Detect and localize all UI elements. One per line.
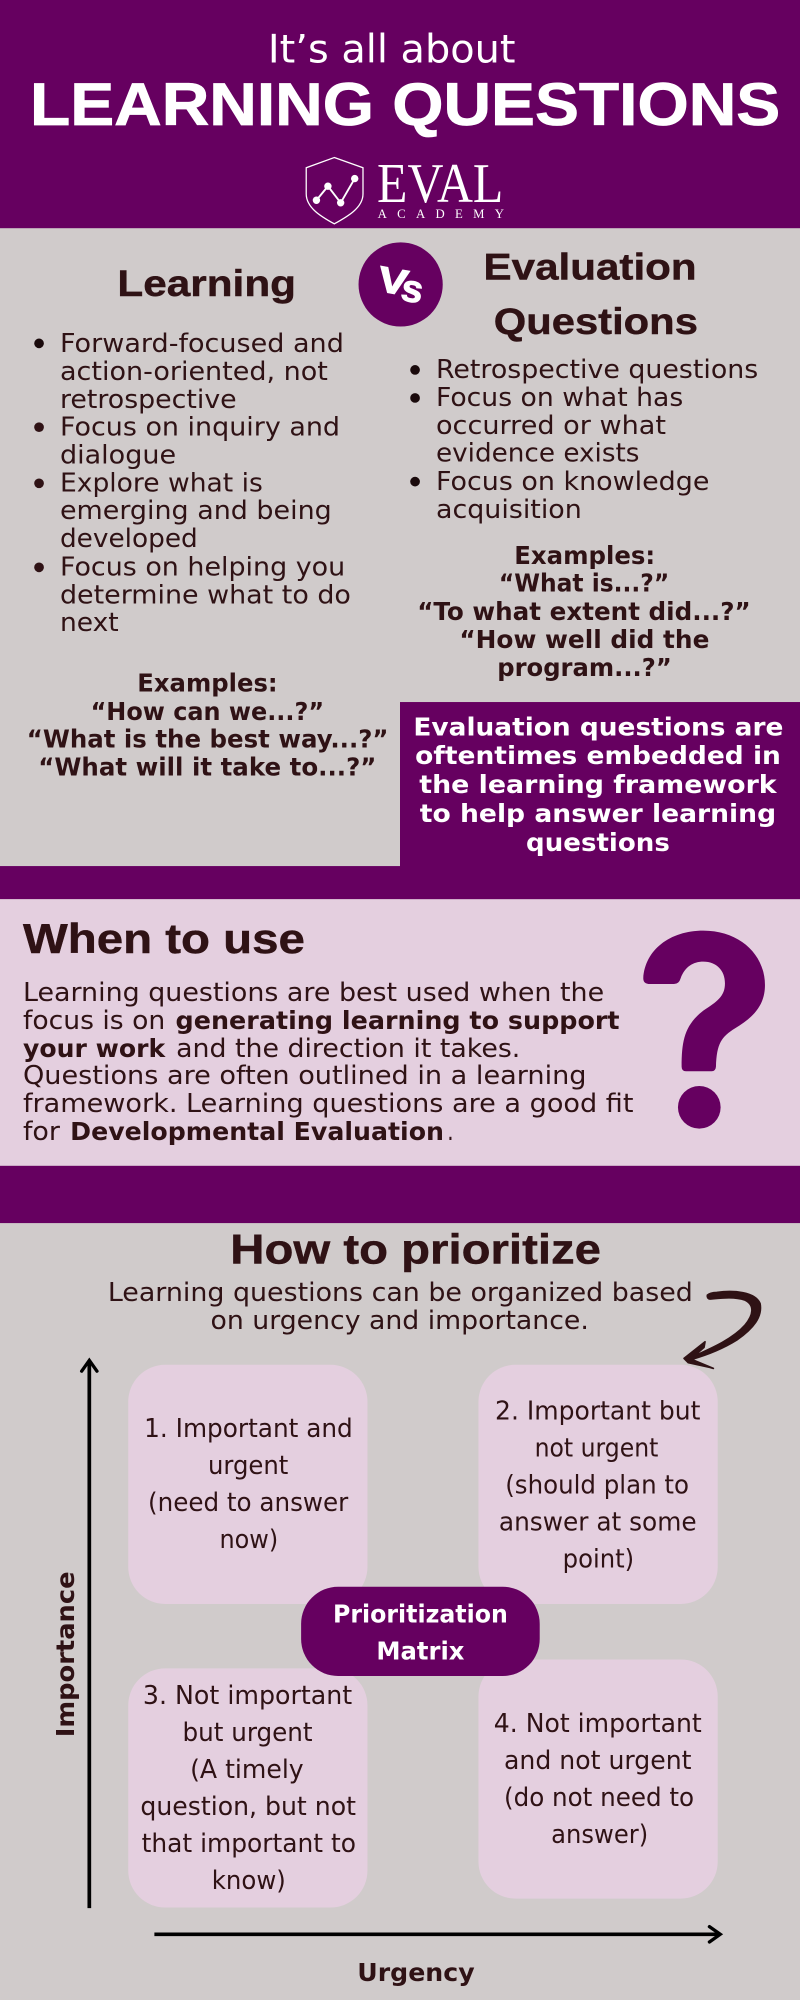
band: purple divider [0, 1166, 800, 1223]
list: learning question traits: Explore what is [60, 468, 263, 498]
heading: When to use: When to use [23, 915, 305, 962]
list: evaluation question traits [410, 355, 758, 525]
arrow: curly arrow to box 2 [684, 1291, 760, 1368]
heading: Evaluation Questions: Questions [494, 301, 698, 342]
title line: It's all about: It’s all about [268, 27, 515, 72]
text: when to use body: for [23, 1117, 60, 1147]
box 2: important but not urgent: not urgent [535, 1434, 658, 1464]
list: learning question traits: next [60, 608, 119, 638]
examples: evaluation questions: “What is...?” [499, 569, 669, 598]
box 4: not important and not urgent: answer) [551, 1820, 648, 1850]
examples: evaluation questions: program...?” [497, 653, 672, 682]
list: evaluation question traits: Focus on what has [436, 383, 683, 413]
examples: learning questions: “What will it take to...?” [38, 753, 376, 782]
panel: how to prioritize [0, 1223, 800, 2000]
icon: Vs circle: V [375, 259, 411, 304]
heading: How to prioritize: How to prioritize [230, 1225, 601, 1272]
list: learning question traits: developed [60, 524, 198, 554]
box 2: important but not urgent: 2. Important but [495, 1397, 700, 1427]
examples: evaluation questions: “To what extent did...?” [417, 597, 751, 626]
callout: evaluation questions embedded [400, 702, 800, 899]
text: when to use body [23, 978, 633, 1147]
box 1: important and urgent: urgent [208, 1451, 288, 1481]
list: learning question traits: determine what to do [60, 580, 351, 610]
text: when to use body: focus is on [23, 1006, 165, 1036]
examples: learning questions: “How can we...?” [91, 697, 324, 726]
list: evaluation question traits: evidence exists [436, 439, 639, 469]
box 3: not important but urgent: (A timely [190, 1755, 304, 1785]
callout: evaluation questions embedded: to help answer learning [420, 799, 776, 828]
examples: evaluation questions: Examples: [514, 541, 655, 570]
icon: Vs circle: s [398, 266, 427, 312]
heading: Evaluation Questions: Evaluation [484, 246, 697, 287]
list: learning question traits: dialogue [60, 440, 176, 470]
icon: Vs circle [359, 242, 443, 327]
label: Prioritization Matrix: Matrix [376, 1636, 464, 1665]
box 2: important but not urgent: point) [563, 1545, 634, 1575]
text: prioritize intro [108, 1278, 693, 1336]
text: when to use body: your work [23, 1034, 166, 1063]
text: prioritize intro: Learning questions can be organized based [108, 1278, 693, 1308]
examples: evaluation questions: “How well did the [459, 625, 709, 654]
logo: Eval Academy: ACADEMY [378, 207, 504, 221]
label: Prioritization Matrix [301, 1587, 540, 1676]
label: Prioritization Matrix: Prioritization [333, 1599, 508, 1628]
box 3: not important but urgent [128, 1668, 367, 1908]
box 3: not important but urgent: know) [212, 1866, 286, 1896]
arrow: urgency axis [154, 1927, 720, 1942]
callout: evaluation questions embedded: oftentimes embedded in [415, 741, 781, 770]
list: evaluation question traits: Retrospective questions [436, 355, 758, 385]
logo: Eval Academy: EVAL [377, 153, 503, 215]
list: learning question traits: Focus on inquiry and [60, 413, 340, 443]
text: prioritize intro: on urgency and importance. [211, 1306, 589, 1336]
box 1: important and urgent [128, 1365, 367, 1604]
callout: evaluation questions embedded: Evaluation questions are [413, 713, 783, 742]
heading: Learning: Learning [117, 263, 296, 304]
callout: evaluation questions embedded: the learning framework [419, 770, 778, 799]
box 1: important and urgent: (need to answer [148, 1488, 349, 1518]
box 2: important but not urgent: answer at some [499, 1508, 697, 1538]
box 1: important and urgent: 1. Important and [144, 1414, 353, 1444]
heading: Evaluation Questions [484, 246, 698, 342]
text: when to use body: Learning questions are best used when the [23, 978, 604, 1008]
text: when to use body: Questions are often outlined in a learning [23, 1061, 587, 1091]
examples: learning questions [27, 669, 389, 782]
box 4: not important and not urgent: 4. Not important [494, 1709, 702, 1739]
box 1: important and urgent: now) [219, 1525, 278, 1555]
text: when to use body: generating learning to support [176, 1006, 620, 1035]
list: learning question traits: retrospective [60, 385, 237, 415]
examples: learning questions: “What is the best way...?” [27, 724, 389, 753]
box 3: not important but urgent: but urgent [182, 1718, 313, 1748]
logo: Eval Academy [306, 153, 504, 224]
text: when to use body: framework. Learning questions are a good fit [23, 1089, 633, 1119]
list: evaluation question traits: acquisition [436, 495, 582, 525]
text: when to use body: Developmental Evaluation [70, 1117, 444, 1146]
text: when to use body: and the direction it takes. [176, 1034, 520, 1064]
text: when to use body: . [447, 1117, 454, 1147]
box 4: not important and not urgent: and not urgent [504, 1746, 692, 1776]
list: evaluation question traits: occurred or what [436, 411, 666, 441]
list: learning question traits: emerging and being [60, 496, 332, 526]
axis label: Urgency: Urgency [357, 1958, 475, 1987]
list: evaluation question traits: Focus on knowledge [436, 467, 709, 497]
list: learning question traits: action-oriented, not [60, 357, 328, 387]
callout: evaluation questions embedded: questions [526, 828, 670, 857]
band: purple divider [0, 866, 800, 899]
box 3: not important but urgent: 3. Not important [143, 1681, 352, 1711]
box 2: important but not urgent [478, 1365, 718, 1604]
box 4: not important and not urgent [478, 1659, 718, 1899]
box 3: not important but urgent: that important to [142, 1829, 356, 1859]
examples: evaluation questions [417, 541, 751, 682]
axis label: Importance: Importance [51, 1571, 80, 1737]
title: Learning Questions: LEARNING QUESTIONS [30, 71, 780, 138]
list: learning question traits: Forward-focused and [60, 329, 344, 359]
list: learning question traits: Focus on helping you [60, 552, 345, 582]
panel: header [0, 0, 800, 228]
panel: when to use [0, 899, 800, 1166]
box 2: important but not urgent: (should plan to [505, 1471, 689, 1501]
list: learning question traits [34, 329, 351, 638]
icon: question mark [643, 931, 765, 1129]
box 3: not important but urgent: question, but not [140, 1792, 356, 1822]
panel: comparison background [0, 228, 800, 866]
box 4: not important and not urgent: (do not need to [504, 1783, 694, 1813]
examples: learning questions: Examples: [137, 669, 278, 698]
arrow: importance axis [82, 1360, 97, 1908]
